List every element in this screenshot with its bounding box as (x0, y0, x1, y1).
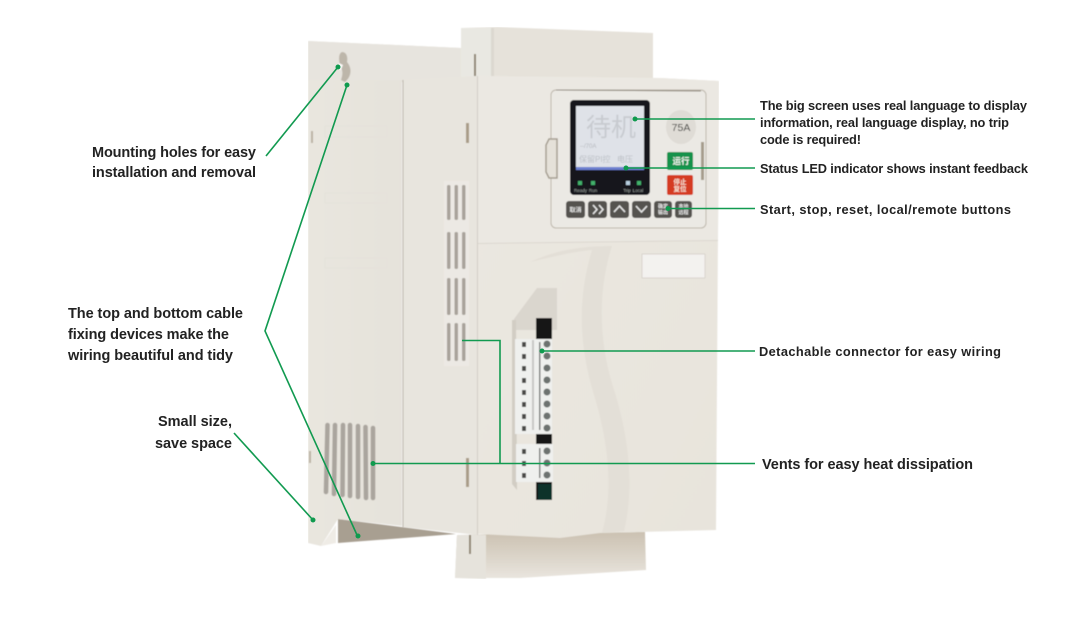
keypad buttons: 取消 (569, 206, 582, 214)
stop reset button (667, 175, 693, 195)
label: big screen: The big screen uses real language to display (760, 98, 1028, 113)
LCD screen: 待机 (586, 114, 636, 142)
stop reset button: 停止 (674, 177, 687, 186)
callout leader: big screen (632, 116, 755, 122)
right handle (701, 142, 704, 180)
front cover (478, 76, 719, 538)
terminal recess (514, 288, 557, 330)
keypad buttons: 确定 (658, 203, 668, 210)
left handle (546, 139, 557, 178)
75A badge (666, 110, 696, 144)
callout leader: status LED (624, 166, 755, 170)
label: cable fixing devices: The top and bottom cable (68, 306, 243, 322)
status LEDs: Trip (623, 188, 631, 193)
stop reset button: 复位 (674, 184, 687, 193)
label: buttons: Start, stop, reset, local/remote buttons (760, 202, 1011, 217)
cable space shadow under body (338, 519, 456, 543)
run button: 运行 (672, 156, 690, 166)
keypad buttons: 输出 (658, 209, 668, 216)
inverter product photo (308, 27, 719, 579)
middle side panel (403, 76, 478, 535)
label: small size: Small size, (158, 414, 232, 430)
terminal connector (515, 318, 553, 500)
status LEDs (574, 181, 643, 193)
label: big screen: information, real language display, no trip (760, 115, 1009, 130)
status LEDs: Local (633, 188, 643, 193)
side vents: lower grille (326, 425, 373, 498)
LCD screen: 保留PI控 (579, 154, 611, 164)
rear top housing (461, 27, 653, 82)
label: mounting holes: Mounting holes for easy (92, 145, 256, 161)
curved decorative band (530, 246, 629, 533)
control panel (546, 90, 706, 228)
label: vents: Vents for easy heat dissipation (762, 457, 973, 473)
LCD screen (570, 100, 650, 195)
label: cable fixing devices: fixing devices make the (68, 327, 229, 343)
keypad buttons: 远程 (678, 209, 689, 216)
LCD screen: 电压 (617, 154, 633, 164)
status LEDs: Ready (574, 188, 588, 193)
side vents: upper grille (447, 185, 466, 361)
75A badge: 75A (672, 122, 690, 134)
keyhole mounting slot (339, 52, 351, 82)
label: mounting holes: installation and removal (92, 165, 256, 181)
callout leader: vents (370, 340, 755, 466)
callout leader: cable fixing devices (265, 82, 360, 538)
label plate (642, 254, 705, 278)
label: cable fixing devices: wiring beautiful and tidy (67, 348, 233, 364)
mounting back plate (308, 41, 461, 546)
callout leader: mounting holes (266, 64, 340, 156)
keypad buttons: 本地 (678, 203, 689, 210)
label: connector: Detachable connector for easy wiring (759, 344, 1001, 359)
callout leader: small size (234, 433, 316, 522)
callout leader: connector (540, 348, 755, 354)
label: status LED: Status LED indicator shows instant feedback (760, 161, 1029, 176)
status LEDs: Run (589, 188, 598, 193)
keypad buttons (566, 201, 692, 218)
LCD screen: --/70A (580, 144, 596, 150)
callout leader: buttons (666, 206, 755, 211)
label: small size: save space (155, 436, 232, 452)
label: big screen: code is required! (760, 132, 861, 147)
bottom housing (455, 532, 646, 579)
run button (667, 152, 693, 170)
